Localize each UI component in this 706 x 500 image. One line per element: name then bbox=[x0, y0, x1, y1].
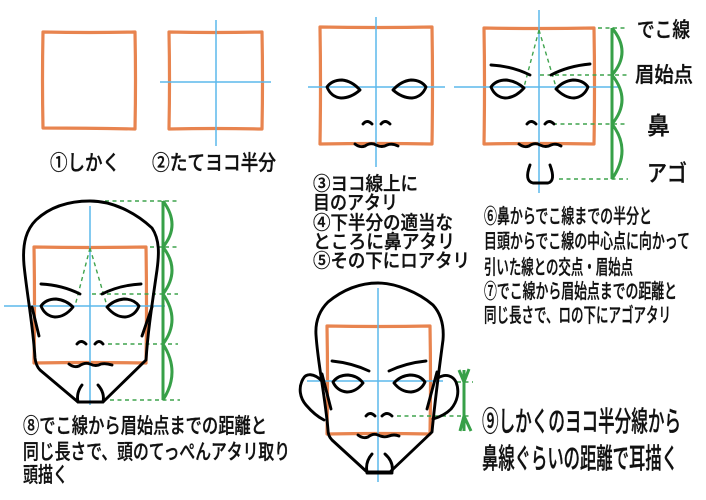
step 9: ear diagram bbox=[300, 283, 473, 482]
green arrows bbox=[459, 369, 471, 431]
step 8 caption bbox=[23, 415, 290, 487]
step 3-5 caption: ③ヨコ線上に bbox=[313, 173, 418, 195]
label: nose: 鼻 bbox=[647, 113, 670, 140]
green measure bbox=[612, 28, 622, 179]
step 8 caption: ⑧でこ線から眉始点までの距離と bbox=[23, 415, 267, 438]
step 3-5 caption: ④下半分の適当な bbox=[313, 212, 453, 234]
step 3-5: eyes, nose and mouth placement bbox=[308, 17, 445, 167]
step 3-5 caption bbox=[313, 173, 470, 272]
label: forehead line: でこ線 bbox=[637, 19, 690, 42]
step 2 caption: ②たてヨコ半分 bbox=[152, 152, 276, 175]
step 6-7: brow point and chin diagram bbox=[454, 10, 693, 193]
step 8: head outline diagram bbox=[4, 201, 180, 405]
green measure bbox=[163, 201, 172, 400]
step 8 caption: 同じ長さで、頭のてっぺんアタリ取り bbox=[23, 441, 290, 464]
label: brow point: 眉始点 bbox=[635, 64, 693, 87]
step 1 caption: ①しかく bbox=[50, 152, 120, 175]
step 3-5 caption: 目のアタリ bbox=[313, 192, 398, 214]
step 8 caption: 頭描く bbox=[23, 464, 68, 487]
step 6-7 caption bbox=[484, 205, 690, 327]
step 1: square bbox=[42, 32, 136, 175]
step 2: square with cross lines bbox=[152, 20, 276, 175]
step 3-5 caption: ところに鼻アタリ bbox=[313, 231, 455, 253]
step 3-5 caption: ⑤その下にロアタリ bbox=[313, 250, 470, 272]
step 9 caption bbox=[482, 406, 681, 474]
label: chin: アゴ bbox=[647, 160, 687, 186]
